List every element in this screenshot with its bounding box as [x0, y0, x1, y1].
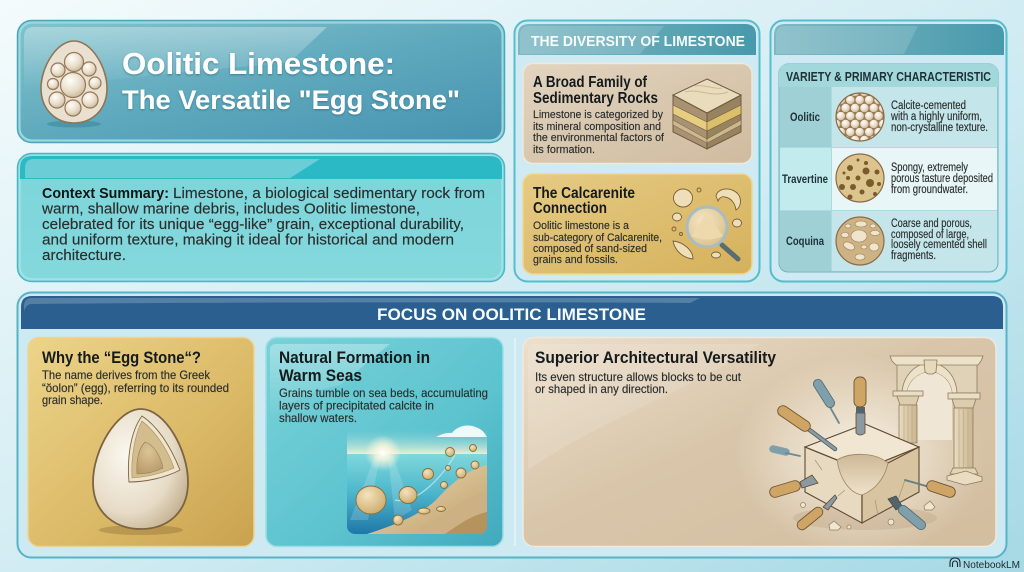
title text: The Versatile "Egg Stone"	[122, 85, 460, 115]
rubble	[800, 501, 935, 530]
illustration: chisels	[773, 377, 950, 525]
row: travertine: Travertine	[782, 174, 828, 186]
card: why the egg stone: Why the “Egg Stone“?	[42, 349, 201, 367]
row: coquina	[786, 217, 987, 265]
card: superior architectural versatility	[523, 338, 996, 555]
card: a broad family: its mineral composition and	[533, 121, 661, 133]
summary text: Context Summary:	[42, 185, 169, 202]
card: why the egg stone: The name derives from the Greek	[42, 368, 211, 382]
row: coquina: Coquina	[786, 236, 824, 248]
card: natural formation: Grains tumble on sea beds, accumulating	[279, 386, 488, 400]
card: a broad family	[523, 64, 752, 164]
card: the calcarenite connection: The Calcarenite	[533, 185, 635, 202]
card: natural formation: shallow waters.	[279, 411, 357, 425]
card: the calcarenite connection: sub-category of Calcarenite,	[533, 232, 662, 244]
card: superior architectural versatility: or shaped in any direction.	[535, 382, 668, 396]
illustration: carved limestone block	[793, 424, 937, 530]
illustration: arch	[890, 356, 983, 485]
heading: THE DIVERSITY OF LIMESTONE	[531, 34, 745, 50]
row: travertine	[782, 154, 993, 202]
row: coquina: Coarse and porous,	[891, 218, 972, 230]
table	[779, 64, 998, 272]
card: a broad family: A Broad Family of	[533, 74, 648, 91]
panel: title banner	[18, 20, 504, 142]
panel: context summary	[18, 154, 504, 282]
row: travertine: porous tasture deposited	[891, 173, 993, 185]
row: coquina: fragments.	[891, 250, 936, 262]
panel: focus on oolitic limestone	[18, 292, 1006, 558]
card: a broad family: Limestone is categorized by	[533, 109, 663, 121]
summary text: and uniform texture, making it ideal for historical and modern	[42, 232, 454, 248]
summary text: architecture.	[42, 247, 126, 264]
summary text: Limestone, a biological sedimentary rock from	[173, 185, 485, 202]
row: coquina: loosely cemented shell	[891, 239, 987, 251]
card: why the egg stone	[28, 338, 254, 546]
chisel: upright	[854, 377, 866, 435]
panel: variety table	[770, 20, 1006, 282]
card: the calcarenite connection: Oolitic limestone is a	[533, 220, 630, 232]
icon: egg cross-section	[93, 409, 188, 535]
row: oolitic: non-crystalline texture.	[891, 122, 988, 134]
row: oolitic: Calcite-cemented	[891, 100, 966, 112]
card: superior architectural versatility: Its even structure allows blocks to be cut	[535, 370, 742, 384]
title text	[122, 46, 460, 115]
card: the calcarenite connection: Connection	[533, 200, 607, 217]
card: the calcarenite connection: composed of sand-sized	[533, 243, 647, 255]
row: oolitic: with a highly uniform,	[890, 111, 982, 123]
row: travertine: from groundwater.	[891, 184, 968, 196]
icon: magnifier with fossils	[672, 188, 742, 259]
row: coquina: composed of large,	[891, 229, 969, 241]
card: a broad family: its formation.	[533, 144, 595, 156]
card: the calcarenite connection: grains and fossils.	[533, 254, 618, 266]
icon: oolitic egg	[41, 41, 107, 128]
summary text: celebrated for its unique “egg-like” grain, exceptional durability,	[42, 216, 464, 233]
table header: VARIETY & PRIMARY CHARACTERISTIC	[786, 70, 991, 84]
row: oolitic	[790, 93, 988, 141]
card: why the egg stone: grain shape.	[42, 393, 103, 407]
logo: NotebookLM: NotebookLM	[963, 559, 1020, 571]
card: natural formation: Natural Formation in	[279, 349, 430, 367]
heading: FOCUS ON OOLITIC LIMESTONE	[377, 305, 646, 324]
title text: Oolitic Limestone:	[122, 46, 395, 81]
summary text: warm, shallow marine debris, includes Oolitic limestone,	[41, 200, 420, 218]
icon: rock strata block	[673, 79, 741, 149]
card: natural formation	[266, 338, 503, 546]
card: why the egg stone: “ŏolon” (egg), referring to its rounded	[42, 381, 229, 395]
card: natural formation: Warm Seas	[279, 367, 362, 385]
illustration: sea scene	[347, 425, 487, 534]
card: a broad family: the environmental factors of	[533, 132, 665, 144]
divider	[514, 338, 516, 546]
card: a broad family: Sedimentary Rocks	[533, 90, 658, 107]
card: natural formation: layers of precipitated calcite in	[279, 398, 434, 412]
card: superior architectural versatility: Superior Architectural Versatility	[535, 349, 777, 367]
card: the calcarenite connection	[523, 174, 752, 274]
row: travertine: Spongy, extremely	[891, 162, 968, 174]
panel: the diversity of limestone	[514, 20, 760, 282]
summary text	[41, 185, 485, 264]
row: oolitic: Oolitic	[790, 112, 821, 124]
